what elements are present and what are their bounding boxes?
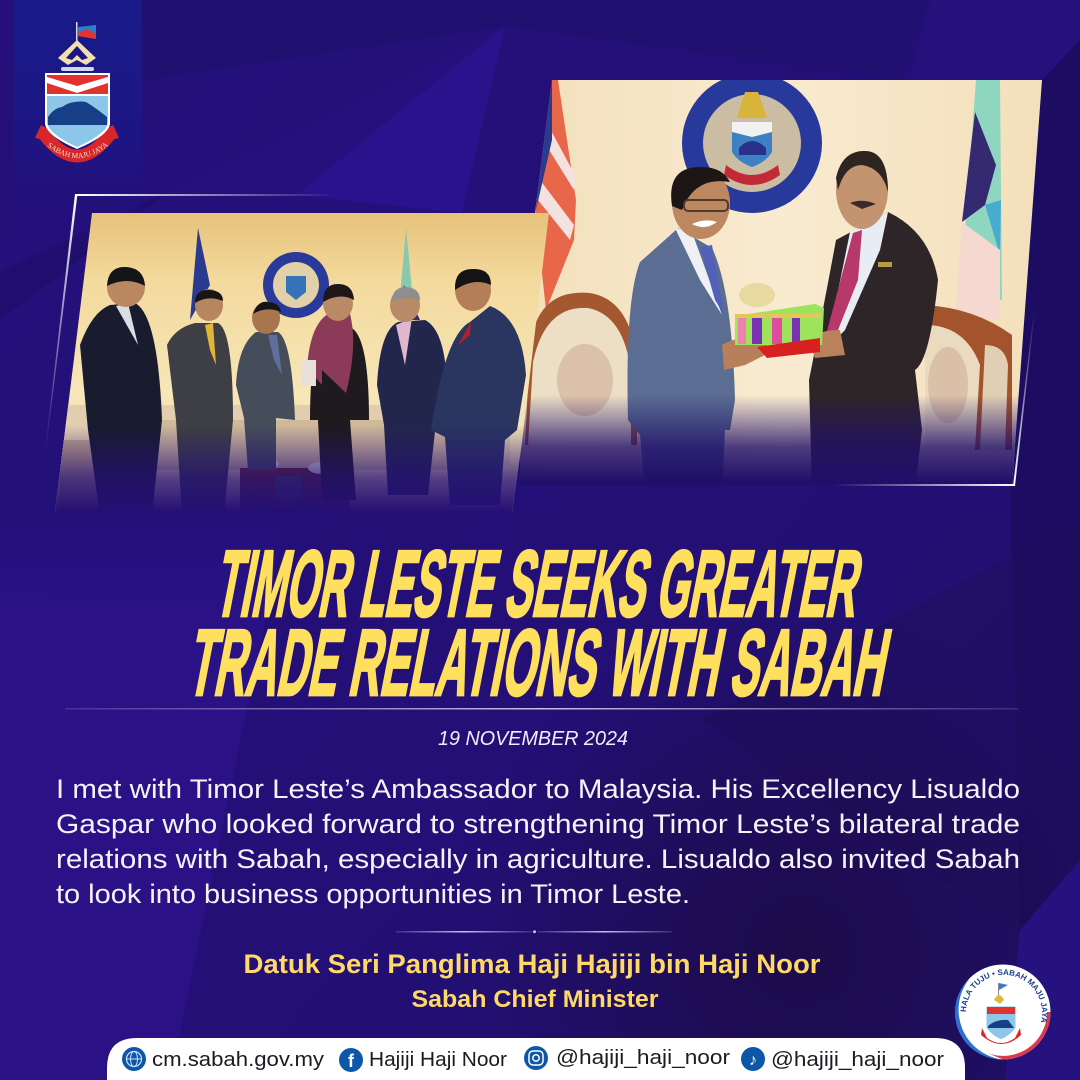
photo: gift presentation <box>520 73 1045 490</box>
wall <box>520 80 1045 485</box>
wall <box>50 213 555 513</box>
logo panel <box>14 0 142 230</box>
right chair <box>925 305 1012 450</box>
flag and crest <box>58 22 96 71</box>
gift box <box>735 283 824 358</box>
flags <box>190 228 420 320</box>
fade to background <box>520 395 1045 487</box>
man on left <box>628 167 768 473</box>
signatory role: Sabah Chief Minister <box>412 986 658 1013</box>
instagram <box>524 1046 730 1070</box>
badge: Hala Tuju Sabah Maju Jaya: HALA TUJU • SABAH MAJU JAYA <box>960 969 1048 1022</box>
signatory name: Datuk Seri Panglima Haji Hajiji bin Haji Noor <box>244 949 821 979</box>
Sabah flag <box>955 80 1002 320</box>
photo: delegation group <box>50 213 555 515</box>
title <box>182 532 898 716</box>
assembly emblem <box>682 73 822 213</box>
tiktok <box>741 1047 944 1071</box>
man on right <box>808 151 938 490</box>
website: cm.sabah.gov.my <box>152 1049 324 1071</box>
sofa and table <box>60 405 510 512</box>
fade to background <box>55 428 524 512</box>
badge: Hala Tuju Sabah Maju Jaya <box>954 964 1050 1060</box>
tiktok: @hajiji_haji_noor <box>771 1049 944 1071</box>
body paragraph: I met with Timor Leste’s Ambassador to Malaysia. His Excellency Lisualdo <box>56 774 1020 804</box>
instagram: @hajiji_haji_noor <box>556 1047 730 1069</box>
facebook: Hajiji Haji Noor <box>369 1049 507 1071</box>
body paragraph: Gaspar who looked forward to strengthening Timor Leste’s bilateral trade <box>56 809 1020 839</box>
emblem <box>263 252 329 318</box>
ribbon with motto: SABAH MAJU JAYA <box>48 142 108 158</box>
body paragraph <box>56 774 1020 909</box>
contact bar <box>107 1038 965 1080</box>
tiktok: ♪ <box>749 1052 757 1069</box>
title rule <box>65 708 1018 710</box>
people <box>80 267 526 515</box>
signature divider <box>396 930 672 933</box>
shield <box>45 73 110 149</box>
logo: Sabah coat of arms <box>35 22 119 162</box>
left chair <box>525 293 637 445</box>
bar background <box>107 1038 965 1080</box>
date: 19 NOVEMBER 2024 <box>438 728 628 750</box>
body paragraph: relations with Sabah, especially in agriculture. Lisualdo also invited Sabah <box>56 844 1020 874</box>
Malaysian flag <box>534 80 576 310</box>
frame lines: right photo <box>833 310 1035 486</box>
body paragraph: to look into business opportunities in Timor Leste. <box>56 879 690 909</box>
frame lines: left photo <box>45 194 336 450</box>
facebook: f <box>348 1051 355 1071</box>
